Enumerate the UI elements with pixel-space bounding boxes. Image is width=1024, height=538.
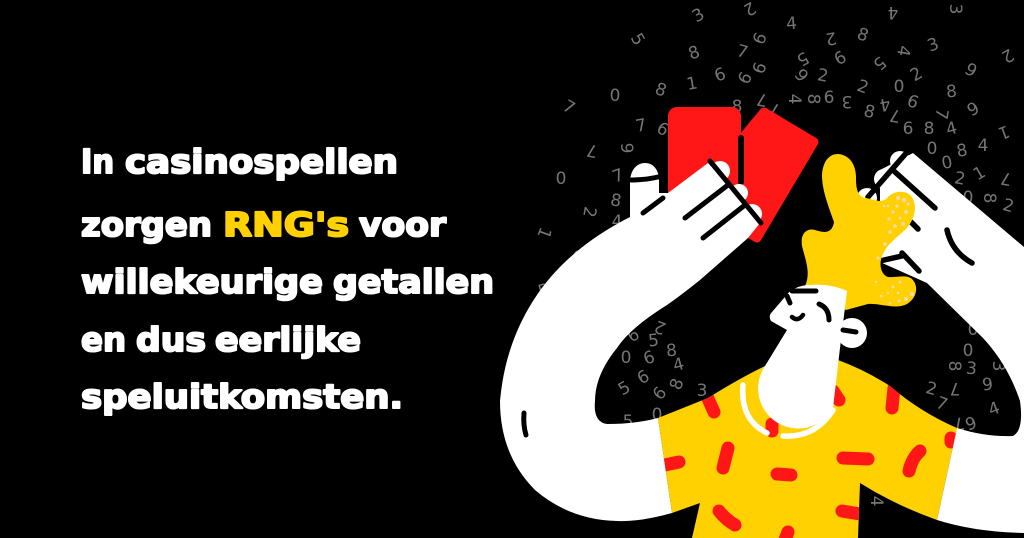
red shirt dashes	[660, 388, 951, 538]
heading line 3: getallen	[333, 262, 494, 301]
heading line 5: speluitkomsten.	[81, 377, 403, 416]
yellow shirt	[658, 360, 957, 538]
scattered grey numbers: 4	[878, 93, 892, 115]
heading line 4	[81, 320, 361, 359]
scattered grey numbers: 2	[578, 205, 600, 219]
scattered grey numbers: 0	[610, 86, 620, 106]
scattered grey numbers: 4	[671, 354, 687, 376]
scattered grey numbers: 4	[784, 94, 804, 104]
scattered grey numbers: 8	[665, 341, 678, 361]
knuckle 3	[742, 204, 762, 224]
scattered grey numbers: 8	[652, 79, 669, 102]
knuckle 3	[857, 188, 877, 208]
scattered grey numbers: 7	[888, 104, 902, 126]
scattered grey numbers: 4	[888, 2, 898, 22]
pinky finger	[630, 163, 659, 222]
scattered grey numbers: 2	[923, 378, 939, 400]
scattered grey numbers: 8	[609, 190, 623, 212]
scattered grey numbers: 5	[615, 377, 634, 400]
scattered grey numbers: 7	[768, 98, 782, 120]
scattered grey numbers: 7	[930, 107, 952, 121]
scattered grey numbers: 5	[626, 30, 649, 49]
scattered grey numbers: 9	[961, 59, 980, 82]
scattered grey numbers: 6	[824, 88, 834, 108]
right arm and hand	[857, 151, 1024, 533]
scattered grey numbers	[532, 0, 1017, 506]
scattered grey numbers: 3	[697, 381, 707, 401]
scattered grey numbers: 3	[925, 34, 942, 57]
heading line 4: en	[81, 320, 126, 359]
scattered grey numbers: 2	[907, 63, 926, 86]
scattered grey numbers: 2	[1000, 195, 1016, 217]
scattered grey numbers: 8	[666, 376, 689, 393]
scattered grey numbers: 9	[964, 98, 983, 121]
scattered grey numbers: 8	[979, 193, 999, 203]
scattered grey numbers: 9	[790, 65, 812, 86]
scattered grey numbers: 1	[532, 224, 555, 241]
scattered grey numbers: 8	[924, 119, 934, 139]
yellow hair	[802, 154, 916, 310]
scattered grey numbers: 1	[685, 73, 699, 95]
finger lines	[631, 161, 761, 238]
scattered grey numbers: 7	[559, 96, 578, 119]
scattered grey numbers: 6	[624, 324, 643, 347]
head and neck	[743, 285, 867, 436]
scattered grey numbers: 1	[995, 120, 1012, 143]
scattered grey numbers: 7	[585, 139, 599, 161]
scattered grey numbers: 6	[749, 60, 772, 77]
scattered grey numbers: 0	[963, 341, 973, 361]
heading line 2 with highlight	[81, 205, 447, 244]
hair shape	[802, 154, 916, 310]
scattered grey numbers: 6	[904, 91, 921, 114]
scattered grey numbers: 5	[793, 47, 812, 70]
scattered grey numbers: 8	[854, 24, 871, 47]
scattered grey numbers: 1	[970, 162, 989, 185]
shirt body	[658, 360, 957, 538]
scattered grey numbers: 2	[816, 65, 830, 87]
heading line 4: eerlijke	[215, 320, 361, 359]
scattered grey numbers: 7	[933, 393, 950, 416]
scattered grey numbers: 9	[616, 143, 636, 153]
scattered grey numbers: 0	[556, 169, 566, 189]
scattered grey numbers: 0	[652, 405, 662, 425]
scattered grey numbers: 4	[944, 118, 960, 140]
scattered grey numbers: 0	[573, 248, 583, 268]
scattered grey numbers: 6	[903, 119, 913, 139]
scattered grey numbers: 7	[734, 41, 750, 63]
scattered grey numbers: 3	[988, 361, 1008, 371]
scattered grey numbers: 7	[610, 165, 627, 188]
scattered grey numbers: 3	[965, 359, 978, 379]
ear	[837, 318, 867, 348]
heading line 3	[81, 262, 494, 301]
scattered grey numbers: 5	[647, 331, 660, 351]
scattered grey numbers: 6	[734, 69, 757, 88]
scattered grey numbers: 6	[712, 64, 729, 87]
scattered grey numbers: 8	[945, 82, 958, 102]
left arm shape	[500, 163, 760, 521]
scattered grey numbers: 2	[652, 315, 669, 338]
scattered grey numbers: 3	[945, 4, 965, 14]
scattered grey numbers: 6	[749, 30, 772, 48]
scattered grey numbers: 8	[732, 97, 742, 117]
scattered grey numbers: 0	[940, 152, 954, 174]
heading text	[81, 142, 494, 416]
knuckle 1	[710, 161, 730, 181]
scattered grey numbers: 2	[953, 168, 967, 190]
scattered grey numbers: 8	[955, 140, 969, 162]
scattered grey numbers: 4	[892, 44, 914, 58]
scattered grey numbers: 6	[831, 47, 850, 70]
knuckle 2	[874, 169, 894, 189]
scattered grey numbers: 3	[842, 91, 852, 111]
scattered grey numbers: 9	[981, 375, 994, 395]
scattered grey numbers: 6	[641, 347, 658, 370]
collar	[743, 385, 833, 436]
scattered grey numbers: 7	[634, 115, 648, 137]
scattered grey numbers: 6	[634, 366, 653, 389]
scattered grey numbers: 0	[927, 139, 937, 159]
knuckle 2	[730, 184, 748, 202]
heading line 1: In	[81, 142, 114, 181]
gap between cards	[738, 138, 744, 182]
scattered grey numbers: 7	[755, 88, 769, 110]
right arm shape	[880, 153, 1024, 533]
scattered grey numbers: 3	[689, 4, 708, 27]
closed eye	[792, 315, 803, 319]
scattered grey numbers: 0	[963, 188, 973, 208]
scattered grey numbers: 6	[649, 383, 671, 404]
scattered grey numbers: 0	[894, 77, 904, 97]
scattered grey numbers: 7	[999, 167, 1013, 189]
elbow mark	[524, 413, 526, 435]
knuckle bumps	[890, 151, 910, 171]
card: left	[668, 107, 741, 207]
nose mark	[819, 304, 829, 320]
scattered grey numbers: 2	[824, 27, 838, 49]
heading line 2 with highlight: RNG's	[223, 205, 349, 244]
ear line	[843, 330, 856, 332]
heading line 1: casinospellen	[125, 142, 398, 181]
heading line 4: dus	[136, 320, 206, 359]
scattered grey numbers: 8	[861, 101, 877, 123]
scattered grey numbers: 6	[653, 118, 672, 141]
scattered grey numbers: 9	[963, 413, 980, 436]
scattered grey numbers: 8	[944, 361, 964, 371]
scattered grey numbers: 5	[623, 412, 633, 432]
scattered grey numbers: 4	[978, 136, 988, 156]
scattered grey numbers: 5	[869, 52, 890, 74]
scattered grey numbers: 2	[998, 44, 1017, 67]
scattered grey numbers: 4	[612, 212, 622, 232]
red cards	[668, 107, 814, 238]
card: right	[744, 112, 814, 238]
eyebrows	[787, 291, 816, 303]
scattered grey numbers: 2	[854, 76, 871, 99]
scattered grey numbers: 8	[686, 42, 703, 65]
speckles	[875, 196, 914, 304]
scattered grey numbers: 7	[950, 378, 960, 398]
finger lines	[868, 151, 972, 271]
scattered grey numbers: 0	[968, 320, 978, 340]
scattered grey numbers: 0	[621, 348, 631, 368]
scattered grey numbers: 4	[986, 398, 1003, 421]
scattered grey numbers: 7	[952, 412, 966, 434]
scattered grey numbers: 8	[803, 94, 823, 104]
heading line 2 with highlight: voor	[359, 205, 447, 244]
scattered grey numbers: 4	[866, 496, 886, 506]
scattered grey numbers: 5	[536, 280, 552, 302]
heading line 3: willekeurige	[81, 262, 323, 301]
scattered grey numbers: 4	[785, 14, 798, 34]
heading line 2 with highlight: zorgen	[81, 205, 212, 244]
face and neck shape	[758, 285, 847, 428]
left arm and hand	[500, 161, 762, 521]
